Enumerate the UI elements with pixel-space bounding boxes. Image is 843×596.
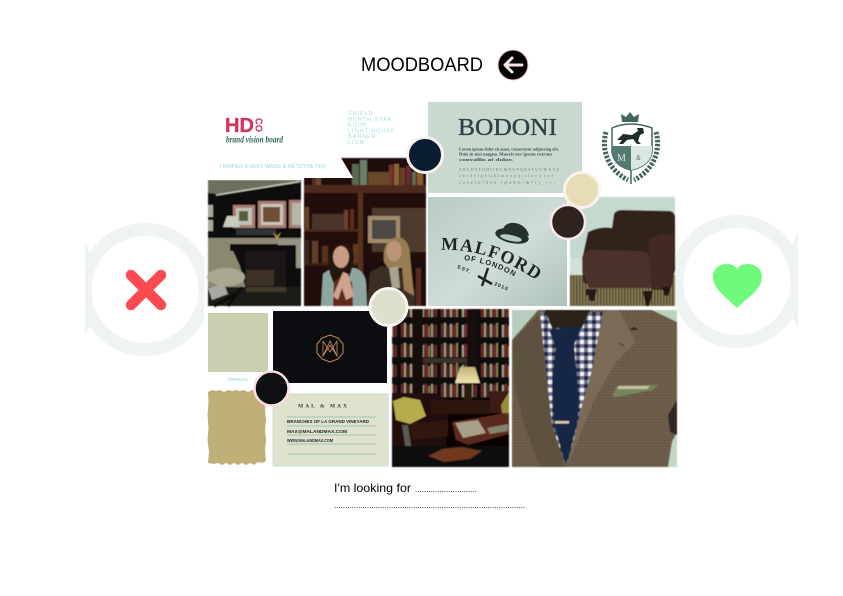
icon: back arrow button (498, 50, 528, 80)
text: keyword list: BOOK (348, 122, 368, 128)
swatch: torn kraft paper (208, 390, 266, 465)
panel: Bodoni typography: abcdefghijklmnopqrstuvwxyz (459, 174, 553, 178)
label: official: OFFICIAL (228, 377, 248, 382)
icon: reject button with red cross (85, 230, 205, 350)
business card: Mal and Max contact details: MAX@MALANDMAX.COM (287, 429, 348, 434)
text: keyword list: LION (348, 140, 365, 146)
business card: Mal and Max contact details: BRANCHES OF LA GRAND VINEYARD (287, 419, 369, 424)
photo: dark living room (207, 180, 301, 306)
panel: Bodoni typography: 1234567890 !@#$%^&*()_+=- (459, 181, 556, 185)
colour swatch: black (254, 372, 288, 406)
text: prompt line: I'm looking for (334, 481, 411, 495)
colour swatch: dark brown (551, 205, 585, 239)
panel: Malford of London logo: MALFORD (441, 238, 540, 278)
icon: crest with horse: & (636, 155, 641, 162)
text: keyword list: BANNER (348, 134, 376, 140)
panel: Bodoni typography: convallis at dolor. (459, 157, 513, 162)
panel: Bodoni typography: Lorem ipsum dolor sit amet, consectetur adipiscing elit. (459, 146, 559, 152)
logo: HD Co brand vision board: CO (252, 118, 264, 132)
business card: Mal and Max contact details (273, 394, 388, 466)
panel: Malford of London logo: OF LONDON (464, 255, 516, 276)
business card: Mal and Max contact details: MAL & MAX (298, 404, 347, 410)
business card: Mal and Max contact details: WWW.MALANDMAX.COM (287, 438, 333, 443)
title: MOODBOARD (361, 54, 483, 76)
photo: leather armchair (570, 197, 675, 306)
photo: library with lamp (392, 309, 509, 467)
panel: Malford of London logo (428, 197, 567, 306)
business card: black with monogram (273, 311, 387, 383)
panel: Bodoni typography (428, 102, 582, 193)
text: keyword list: SHIELD (348, 111, 373, 117)
banner: team names (205, 151, 353, 180)
text: prompt line (334, 481, 525, 510)
logo: HD Co brand vision board: HD (225, 115, 254, 137)
panel: Malford of London logo: EST. (458, 264, 470, 274)
colour swatch: cream (564, 172, 600, 208)
photo: two girls in library (304, 158, 426, 306)
photo: tweed suit with tie (512, 310, 677, 467)
logo: HD Co brand vision board: brand vision board (226, 134, 283, 144)
text: keyword list (348, 111, 395, 146)
banner: team names: HARPER EVANS WADE & NETEYMEYER (220, 164, 326, 170)
panel: Bodoni typography: Duis in nisi magna. Mauris nec ipsum rutrum (459, 152, 552, 156)
icon: like button with green heart (677, 222, 798, 342)
text: keyword list: LIGHT HOUSE (348, 128, 395, 134)
colour swatch: navy (408, 138, 442, 172)
text: keyword list: NORTH STAR (348, 117, 393, 123)
panel: Bodoni typography: BODONI (458, 115, 557, 141)
icon: crest with horse: M (617, 153, 626, 164)
panel: moodboard collage (206, 102, 678, 468)
panel: Bodoni typography: ABCDEFGHIJKLMNOPQRSTUVWXYZ (459, 168, 560, 172)
icon: crest with horse (604, 112, 658, 184)
logo: HD Co brand vision board (225, 115, 283, 144)
colour swatch: pale sage (370, 288, 407, 326)
panel: Malford of London logo: 2010 (494, 282, 508, 290)
text: prompt line: ....................................................................................... (334, 501, 525, 510)
text: prompt line: ............................ (415, 485, 477, 494)
swatch: sage paper (208, 313, 268, 372)
